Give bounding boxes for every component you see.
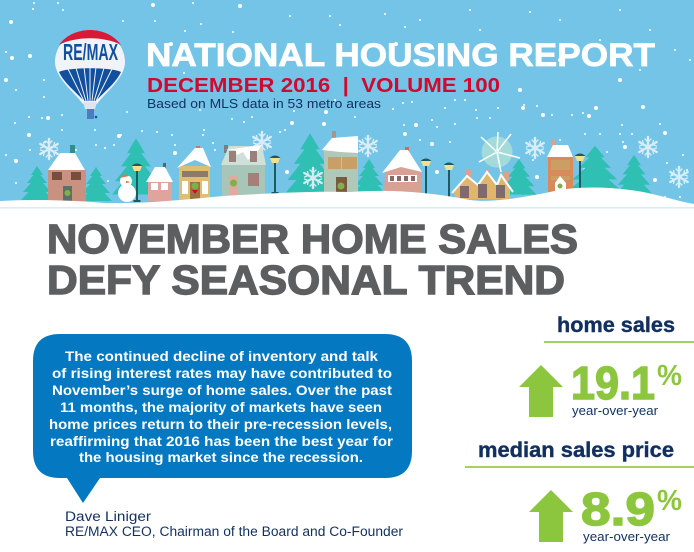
percent sign: %	[657, 485, 682, 517]
headline: NOVEMBER HOME SALES	[47, 216, 578, 262]
falling snow	[6, 3, 690, 197]
headline	[47, 216, 578, 303]
stat heading: median sales price: median sales price	[478, 439, 674, 462]
house 3	[177, 146, 211, 201]
stat: median sales price	[465, 439, 694, 544]
caption: year-over-year	[572, 403, 659, 418]
quote text: November’s surge of home sales. Over the past	[52, 383, 393, 398]
snowy hills	[0, 188, 694, 207]
quote text: home prices return to their pre-recession levels,	[49, 417, 392, 432]
house 1	[48, 145, 86, 201]
header: winter sky background	[0, 0, 694, 208]
stat: home sales	[519, 314, 694, 418]
quote attribution: RE/MAX CEO, Chairman of the Board and Co-Founder	[65, 524, 404, 539]
snowman	[118, 174, 136, 202]
icon: sparkling ornament	[479, 132, 520, 172]
title: NATIONAL HOUSING REPORT	[146, 37, 655, 73]
house 2	[146, 163, 173, 201]
quote attribution: Dave Liniger	[65, 509, 152, 524]
quote text	[49, 349, 394, 465]
snowflakes	[40, 132, 688, 188]
house 8	[547, 140, 573, 193]
icon: up arrow	[519, 365, 563, 417]
percent sign: %	[657, 360, 682, 392]
house 6	[382, 147, 422, 194]
stat heading: home sales: home sales	[557, 314, 675, 337]
background trees	[21, 133, 652, 201]
icon: up arrow	[529, 490, 573, 542]
quote attribution	[65, 509, 404, 539]
quote text: 11 months, the majority of markets have seen	[60, 400, 382, 415]
quote text: reaffirming that 2016 has been the best year for	[50, 434, 394, 449]
value: 19.1%: 19.1	[571, 357, 655, 409]
headline: DEFY SEASONAL TREND	[47, 257, 565, 303]
icon: RE/MAX hot air balloon: RE/MAX	[63, 39, 118, 65]
value: 8.9%: 8.9	[581, 483, 655, 535]
data source note: Based on MLS data in 53 metro areas	[147, 96, 382, 111]
house 7	[452, 169, 513, 199]
quote speech bubble	[33, 334, 412, 503]
subtitle: date and volume: DECEMBER 2016 | VOLUME 100	[147, 74, 500, 97]
quote text: The continued decline of inventory and talk	[65, 349, 379, 364]
street lamps	[132, 154, 586, 202]
house 4	[221, 145, 266, 196]
quote text: the housing market since the recession.	[79, 450, 363, 465]
house 5	[322, 131, 358, 196]
ground line	[0, 207, 694, 208]
icon: RE/MAX hot air balloon	[55, 30, 125, 119]
quote text: of rising interest rates may have contributed to	[52, 366, 392, 381]
caption: year-over-year	[583, 529, 671, 544]
